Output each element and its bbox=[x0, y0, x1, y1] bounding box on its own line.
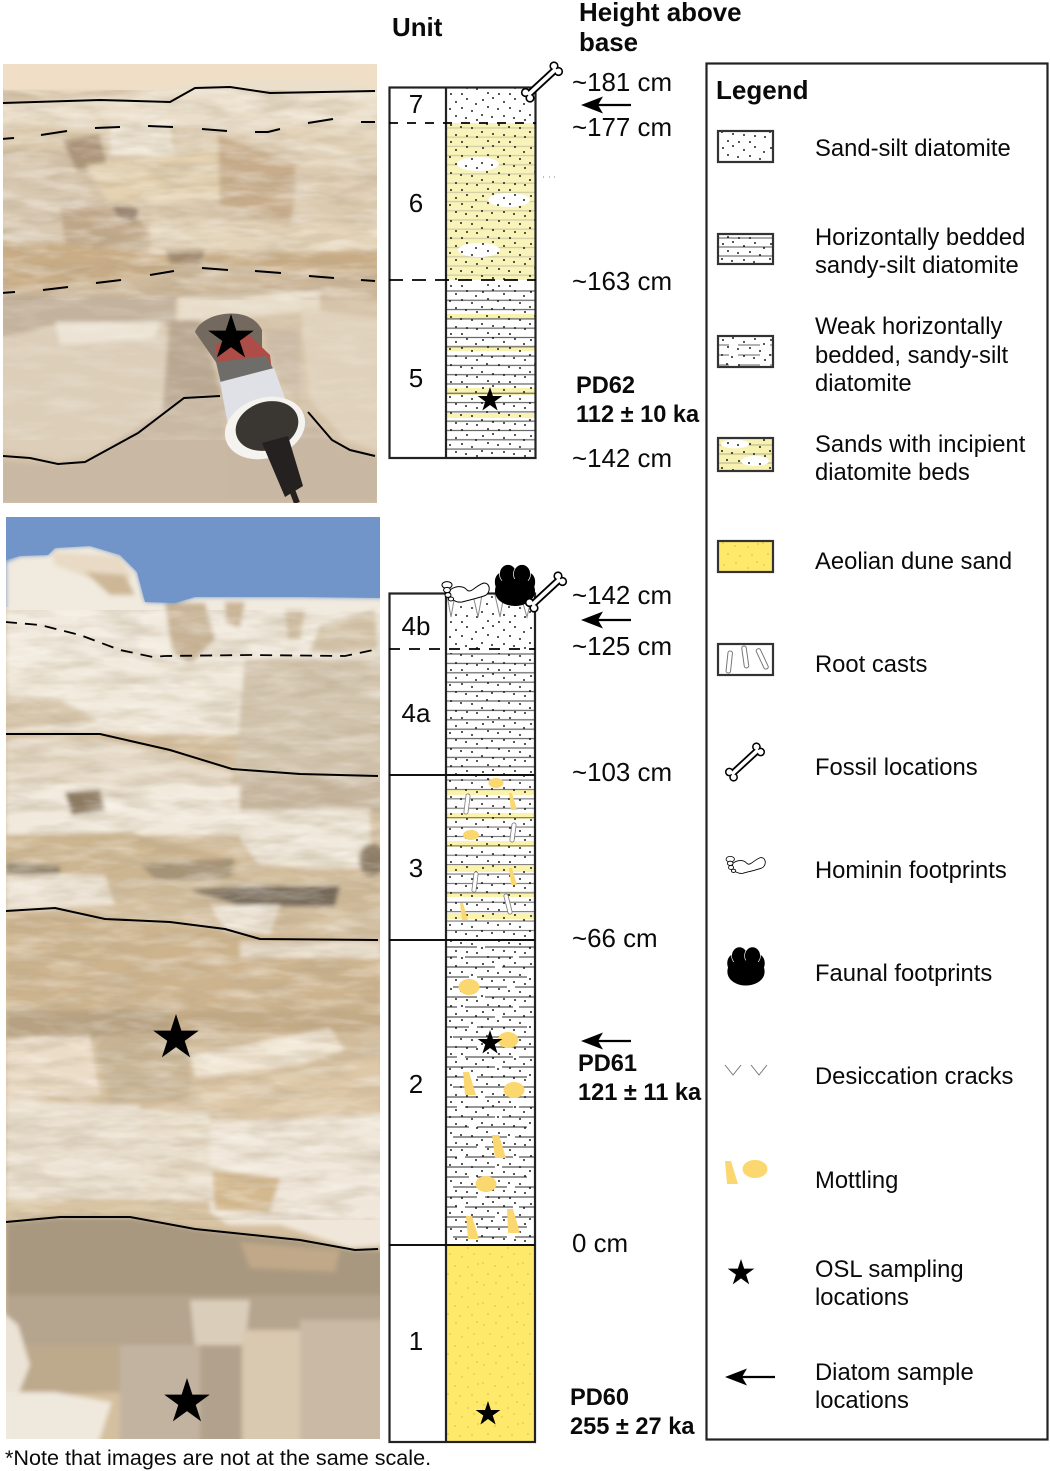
height labels lower: ~66 cm bbox=[572, 925, 658, 953]
legend swatch: weak bedded bbox=[718, 336, 773, 367]
heading: height above base: base bbox=[579, 29, 638, 57]
legend title: Legend bbox=[716, 75, 808, 105]
legend label: sand-silt: Sand-silt diatomite bbox=[815, 135, 1011, 162]
icon: diatom sample arrow PD61 bbox=[581, 1032, 631, 1050]
unit labels lower: 3 bbox=[409, 853, 423, 883]
unit labels upper bbox=[409, 89, 423, 393]
height labels lower: ~125 cm bbox=[572, 633, 672, 661]
icon: OSL sample star, middle of photo 2 bbox=[153, 1014, 199, 1057]
legend label: faunal: Faunal footprints bbox=[815, 960, 992, 987]
unit 5 horizontally bedded bbox=[447, 284, 535, 458]
footnote: *Note that images are not at the same scale. bbox=[5, 1445, 431, 1470]
panel: lower stratigraphic column bbox=[389, 564, 567, 1442]
heading: unit: Unit bbox=[392, 14, 443, 42]
legend swatch: sands with incipient beds bbox=[718, 438, 773, 471]
legend swatch: sand-silt bbox=[718, 131, 773, 162]
legend label: weak bedded: Weak horizontally bbox=[815, 313, 1002, 340]
unit labels upper: 5 bbox=[409, 363, 423, 393]
legend label: desiccation: Desiccation cracks bbox=[815, 1063, 1013, 1090]
legend label: weak bedded: diatomite bbox=[815, 370, 912, 397]
height labels lower bbox=[572, 582, 672, 1258]
legend label: sands with incipient beds: diatomite beds bbox=[815, 459, 970, 486]
legend icon: desiccation cracks bbox=[725, 1065, 767, 1075]
height labels upper: ~181 cm bbox=[572, 69, 672, 97]
legend label: diatom: Diatom sample bbox=[815, 1359, 974, 1386]
legend label: hominin: Hominin footprints bbox=[815, 857, 1007, 884]
stray specks bbox=[543, 176, 555, 178]
panel: upper outcrop photograph bbox=[0, 60, 380, 503]
unit 1 aeolian dune sand bbox=[446, 1245, 535, 1442]
photo: cliff colour bands bbox=[0, 546, 385, 1445]
sample label PD60: 255 ± 27 ka bbox=[570, 1414, 695, 1440]
icon: fossil bone upper bbox=[521, 61, 563, 103]
sample label PD62: 112 ± 10 ka bbox=[576, 402, 700, 428]
legend label: root casts: Root casts bbox=[815, 651, 928, 678]
icon: hominin footprint on surface bbox=[442, 582, 489, 602]
photo: unit boundary lines bbox=[2, 87, 375, 464]
legend label: horizontally bedded: sandy-silt diatomite bbox=[815, 252, 1019, 279]
sample label PD61: 121 ± 11 ka bbox=[578, 1080, 702, 1106]
unit labels lower: 4a bbox=[402, 698, 431, 728]
legend swatch: aeolian bbox=[718, 541, 773, 572]
legend swatch: root casts bbox=[718, 644, 773, 675]
unit labels lower: 1 bbox=[409, 1326, 423, 1356]
unit column frame lower bbox=[389, 593, 535, 1442]
legend icon: mottling bbox=[725, 1160, 768, 1184]
legend label: mottling: Mottling bbox=[815, 1167, 898, 1194]
sample label PD60: PD60 bbox=[570, 1385, 629, 1411]
photo: sampling tube bbox=[195, 314, 313, 503]
legend label: weak bedded: bedded, sandy-silt bbox=[815, 342, 1009, 369]
unit labels lower: 2 bbox=[409, 1069, 423, 1099]
icon: OSL star unit 1 bbox=[476, 1401, 500, 1425]
desiccation cracks bbox=[447, 595, 531, 617]
photo: rock texture bbox=[6, 610, 380, 1220]
height labels upper: ~142 cm bbox=[572, 445, 672, 473]
panel: lower outcrop photograph bbox=[0, 517, 385, 1445]
unit labels upper: 6 bbox=[409, 188, 423, 218]
icon: OSL star unit 2 bbox=[478, 1030, 502, 1054]
unit 6 sands with incipient diatomite bbox=[447, 123, 535, 280]
legend label: OSL: locations bbox=[815, 1284, 909, 1311]
height labels upper: ~163 cm bbox=[572, 268, 672, 296]
legend label: horizontally bedded: Horizontally bedded bbox=[815, 224, 1025, 251]
photo: cliff silhouette sky edge bbox=[6, 543, 380, 603]
photo: unit boundary lines bbox=[5, 622, 378, 1250]
photo: exposed sand and rock layers bbox=[0, 60, 380, 503]
unit 4a horizontally bedded bbox=[447, 653, 535, 775]
legend icon: star bbox=[728, 1259, 754, 1284]
legend label: diatom: locations bbox=[815, 1387, 909, 1414]
photo: rock texture bbox=[3, 90, 377, 300]
icon: fossil bone lower bbox=[525, 571, 567, 613]
height labels lower: ~142 cm bbox=[572, 582, 672, 610]
unit labels lower: 4b bbox=[402, 611, 430, 641]
sample label PD62: PD62 bbox=[576, 373, 635, 399]
icon: OSL sample star, bottom of photo 2 bbox=[164, 1378, 210, 1421]
icon: diatom sample arrow upper bbox=[581, 96, 631, 114]
unit 2 weak horizontally bedded with mottling bbox=[447, 941, 535, 1245]
legend swatch: horizontally bedded bbox=[718, 234, 773, 264]
legend icon: hominin footprint bbox=[726, 856, 765, 873]
height labels lower: 0 cm bbox=[572, 1230, 628, 1258]
unit labels upper: 7 bbox=[409, 89, 423, 119]
height labels upper bbox=[572, 69, 672, 473]
icon: OSL sample star, photo 1 bbox=[208, 314, 254, 357]
icon: faunal footprint on surface bbox=[494, 564, 536, 606]
height labels upper: ~177 cm bbox=[572, 114, 672, 142]
unit 7 sand-silt bbox=[446, 87, 535, 123]
legend label: fossil: Fossil locations bbox=[815, 754, 978, 781]
legend icon: bone bbox=[725, 742, 765, 782]
unit 4b sand-silt bbox=[446, 593, 535, 649]
legend label: aeolian: Aeolian dune sand bbox=[815, 548, 1012, 575]
unit labels lower bbox=[402, 611, 431, 1356]
height labels lower: ~103 cm bbox=[572, 759, 672, 787]
legend icon: faunal footprint bbox=[727, 947, 765, 986]
unit column frame bbox=[389, 87, 536, 458]
panel: legend bbox=[706, 64, 1048, 1440]
legend icon: arrow bbox=[725, 1368, 775, 1386]
icon: diatom sample arrow lower bbox=[581, 612, 631, 628]
legend label: OSL: OSL sampling bbox=[815, 1256, 964, 1283]
sample label PD61: PD61 bbox=[578, 1051, 637, 1077]
icon: OSL star unit 5 bbox=[478, 387, 502, 411]
panel: upper stratigraphic column bbox=[389, 61, 563, 458]
unit 3 bedded with yellow bands and mottling bbox=[447, 775, 535, 940]
legend label: sands with incipient beds: Sands with incipient bbox=[815, 431, 1025, 458]
photo: sky bbox=[6, 546, 380, 607]
